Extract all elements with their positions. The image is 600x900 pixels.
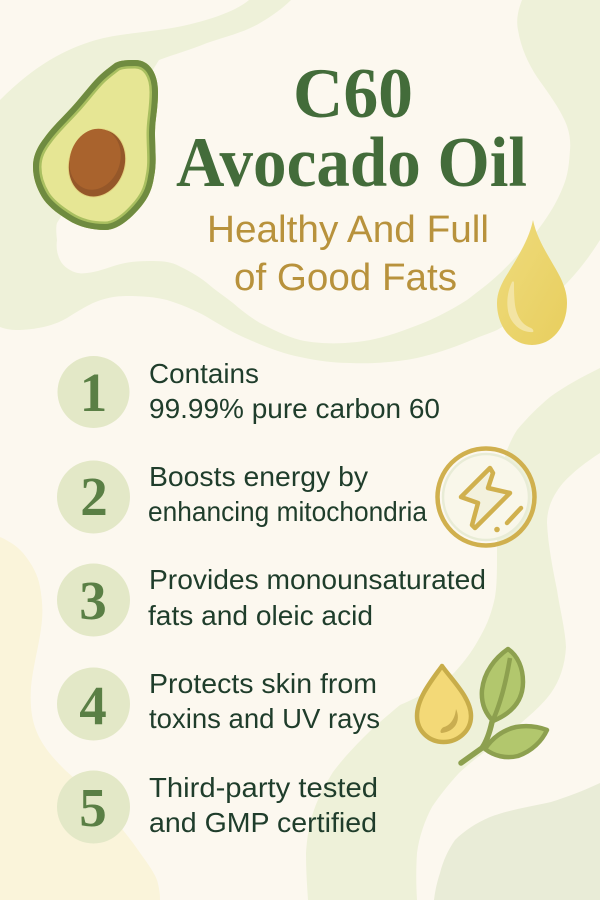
number badge 2: 2 (80, 466, 108, 527)
number badge 4 (57, 668, 130, 740)
number badge 1: 1 (80, 362, 107, 423)
icon: oil drop (497, 220, 567, 345)
text 3: Provides monounsaturated (149, 564, 486, 595)
text 2 (148, 461, 427, 527)
icon: green leaves (461, 649, 547, 763)
subtitle: of Good Fats (234, 257, 457, 299)
number badge 4: 4 (79, 675, 107, 736)
number badge 2 (57, 460, 130, 534)
text 4: toxins and UV rays (149, 703, 380, 734)
number badge 5: 5 (79, 777, 107, 838)
list item 4 (57, 668, 380, 740)
text 1: 99.99% pure carbon 60 (149, 393, 440, 424)
number badge 5 (57, 770, 130, 844)
text 1: Contains (149, 358, 259, 389)
text 5: Third-party tested (149, 772, 378, 803)
background shape: right green wave (306, 368, 600, 900)
number badge 3: 3 (79, 570, 107, 631)
background shape: bottom right blob (434, 783, 600, 900)
title: Avocado Oil (176, 124, 527, 202)
subtitle (207, 209, 489, 299)
text 2: enhancing mitochondria (148, 496, 427, 527)
number badge 1 (58, 356, 130, 428)
text 4 (149, 668, 380, 734)
icon: small oil drop (417, 666, 471, 742)
number badge 3 (57, 564, 130, 636)
background shape: left yellow blob (0, 537, 160, 900)
text 3: fats and oleic acid (148, 600, 373, 631)
title: C60 (293, 55, 413, 133)
list item 1 (58, 356, 440, 428)
text 2: Boosts energy by (149, 461, 368, 492)
background shape: upper green wave (0, 0, 600, 363)
list item 2 (57, 460, 427, 534)
list item 3 (57, 564, 486, 636)
icon: avocado half (33, 60, 158, 230)
text 5: and GMP certified (149, 807, 377, 838)
text 3 (148, 564, 486, 631)
list item 5 (57, 770, 378, 844)
text 4: Protects skin from (149, 668, 377, 699)
text 1 (149, 358, 440, 424)
text 5 (149, 772, 378, 838)
icon: energy bolt in circle (438, 448, 534, 546)
title (176, 55, 527, 202)
subtitle: Healthy And Full (207, 209, 489, 251)
avocado pit (59, 121, 135, 205)
